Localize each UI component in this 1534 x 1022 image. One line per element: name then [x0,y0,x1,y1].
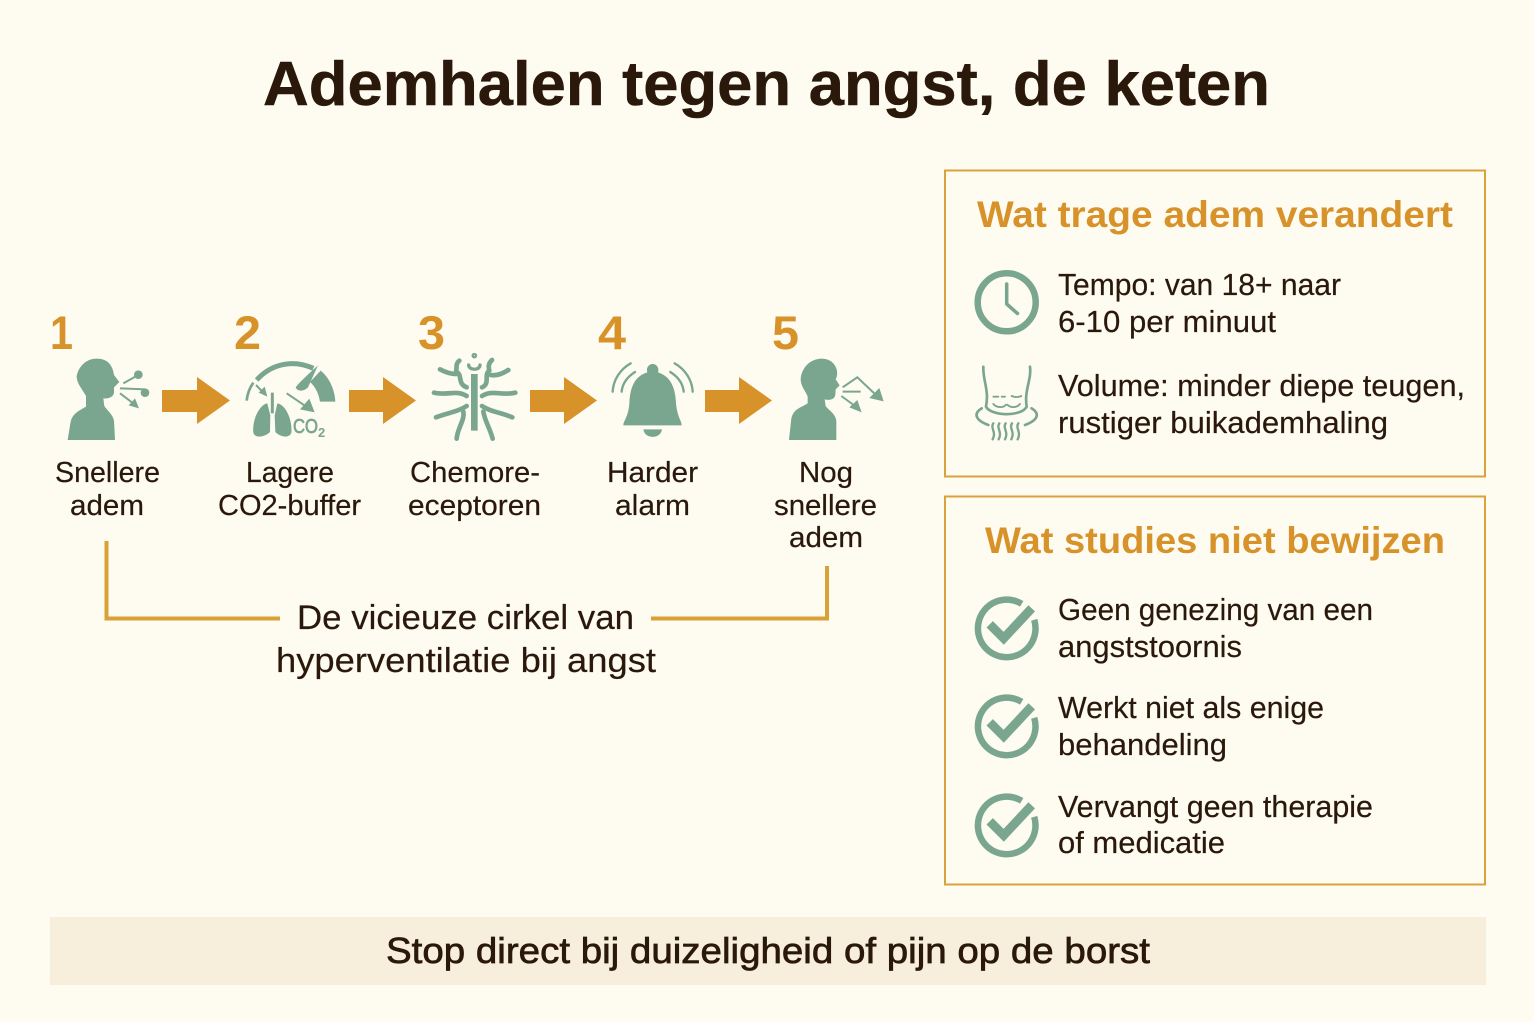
step 3: chemoreceptoren [408,306,541,522]
step 2: lagere CO2-buffer: CO2-buffer [218,490,361,522]
icon: lungs and CO2 gauge: 2 [318,425,325,440]
icon: check 1 [978,600,1036,657]
arrow 3 [530,377,597,424]
item 2 text: Werkt niet als enige [1058,690,1324,725]
icon: person breathing faster [789,359,884,440]
step 1: snellere adem: adem [70,490,144,522]
step 2: lagere CO2-buffer: 2 [234,306,261,359]
icon: chemoreceptor neuron [434,354,515,439]
icon: person breathing fast [68,359,149,440]
step 4: harder alarm: 4 [598,306,626,359]
icon: check 3 [978,797,1036,854]
item 1 text [1058,592,1373,664]
icon: ringing bell [613,363,693,437]
label: Nog [799,457,853,489]
item 3 text: Vervangt geen therapie [1058,789,1373,824]
tempo text: Tempo: van 18+ naar [1058,267,1341,302]
step 5: nog snellere adem [772,306,884,554]
tempo text [1058,267,1341,339]
heading: Wat trage adem verandert [977,194,1453,235]
arrow 4 [705,377,772,424]
title: Ademhalen tegen angst, de keten [263,50,1270,119]
label: Harder [607,457,698,489]
item 2 text [1058,690,1324,762]
vicious circle caption: hyperventilatie bij angst [276,642,657,680]
icon: check 2 [978,698,1036,755]
item 3 text: of medicatie [1058,825,1225,860]
vicious circle connector [106,541,827,618]
panel: wat studies niet bewijzen [945,496,1485,884]
item 3 text [1058,789,1373,860]
step 3: chemoreceptoren: 3 [418,306,445,359]
step 5: nog snellere adem: 5 [772,306,799,359]
label: Lagere [246,457,334,489]
icon: belly breathing [977,367,1037,439]
step 4: harder alarm [598,306,698,522]
tempo text: 6-10 per minuut [1058,304,1276,339]
icon: lungs and CO2 gauge: CO [293,416,318,438]
step 1: snellere adem: 1 [50,306,73,359]
arrow 2 [349,377,416,424]
volume text [1058,368,1465,440]
step 5: nog snellere adem: snellere [774,490,877,522]
volume text: Volume: minder diepe teugen, [1058,368,1465,403]
vicious circle caption [276,599,657,680]
vicious circle caption: De vicieuze cirkel van [297,599,634,637]
arrow 1 [162,377,230,424]
step 4: harder alarm: alarm [615,490,690,522]
heading: Wat studies niet bewijzen [985,520,1445,561]
volume text: rustiger buikademhaling [1058,405,1388,440]
icon: clock [978,273,1036,331]
step 3: chemoreceptoren: eceptoren [408,490,541,522]
panel: wat trage adem verandert [945,170,1485,476]
step 1: snellere adem [50,306,160,522]
label: Chemore- [410,457,540,489]
warning banner: Stop direct bij duizeligheid of pijn op de borst [386,930,1150,971]
step 5: nog snellere adem: adem [789,522,863,554]
label: Snellere [55,457,160,489]
item 1 text: angststoornis [1058,629,1242,664]
warning banner [50,917,1486,985]
step 2: lagere CO2-buffer [218,306,361,522]
item 2 text: behandeling [1058,727,1227,762]
icon: lungs and CO2 gauge [247,364,335,440]
item 1 text: Geen genezing van een [1058,592,1373,627]
